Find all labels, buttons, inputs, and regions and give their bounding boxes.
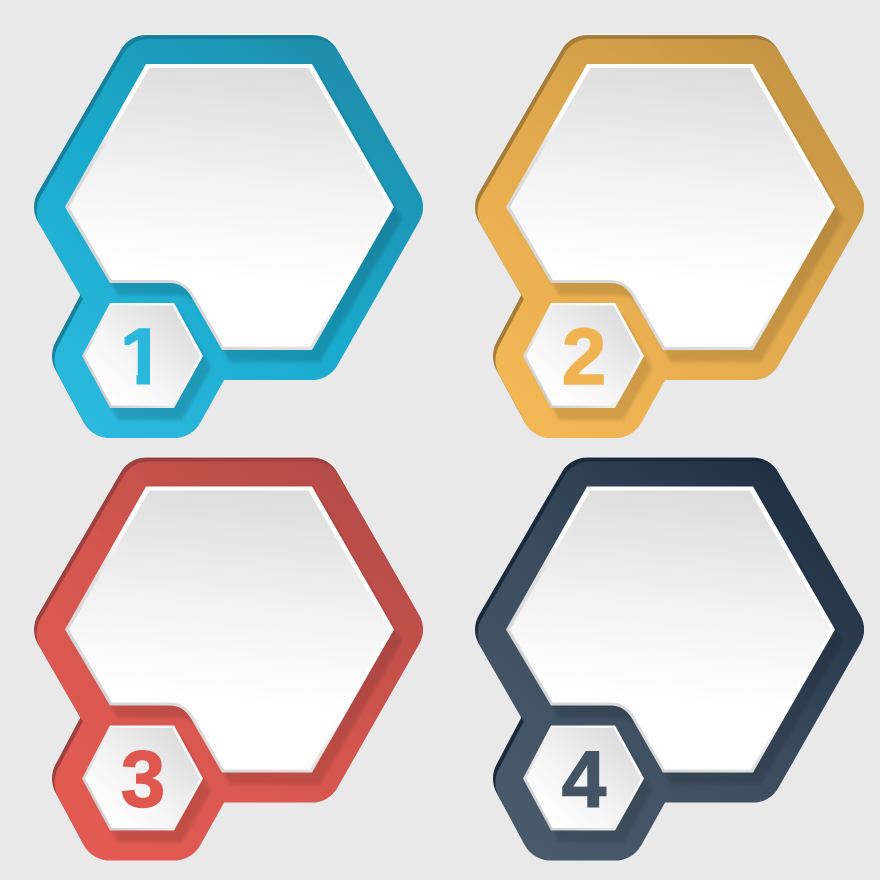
outer band red (63, 486, 402, 842)
small number hexagon 3: 3 (121, 734, 165, 824)
small number hexagon 4: 4 (562, 734, 607, 824)
small number hexagon 1 (82, 303, 203, 408)
panel: card 2 orange (504, 63, 843, 420)
small number hexagon 1: 1 (120, 312, 164, 401)
panel: card 3 red (63, 486, 402, 842)
small number hexagon 4 (523, 726, 644, 830)
large white hexagon (506, 64, 835, 350)
small number hexagon 3 (82, 726, 203, 830)
outer band orange (504, 63, 843, 420)
large white hexagon (506, 486, 835, 772)
large white hexagon (65, 486, 394, 772)
small number hexagon 2: 2 (562, 312, 606, 401)
outer band navy (504, 486, 843, 842)
small number hexagon 2 (523, 303, 644, 408)
panel: card 4 navy (504, 486, 843, 842)
panel: card 1 blue (63, 63, 402, 420)
large white hexagon (65, 64, 394, 350)
outer band blue (63, 63, 402, 420)
